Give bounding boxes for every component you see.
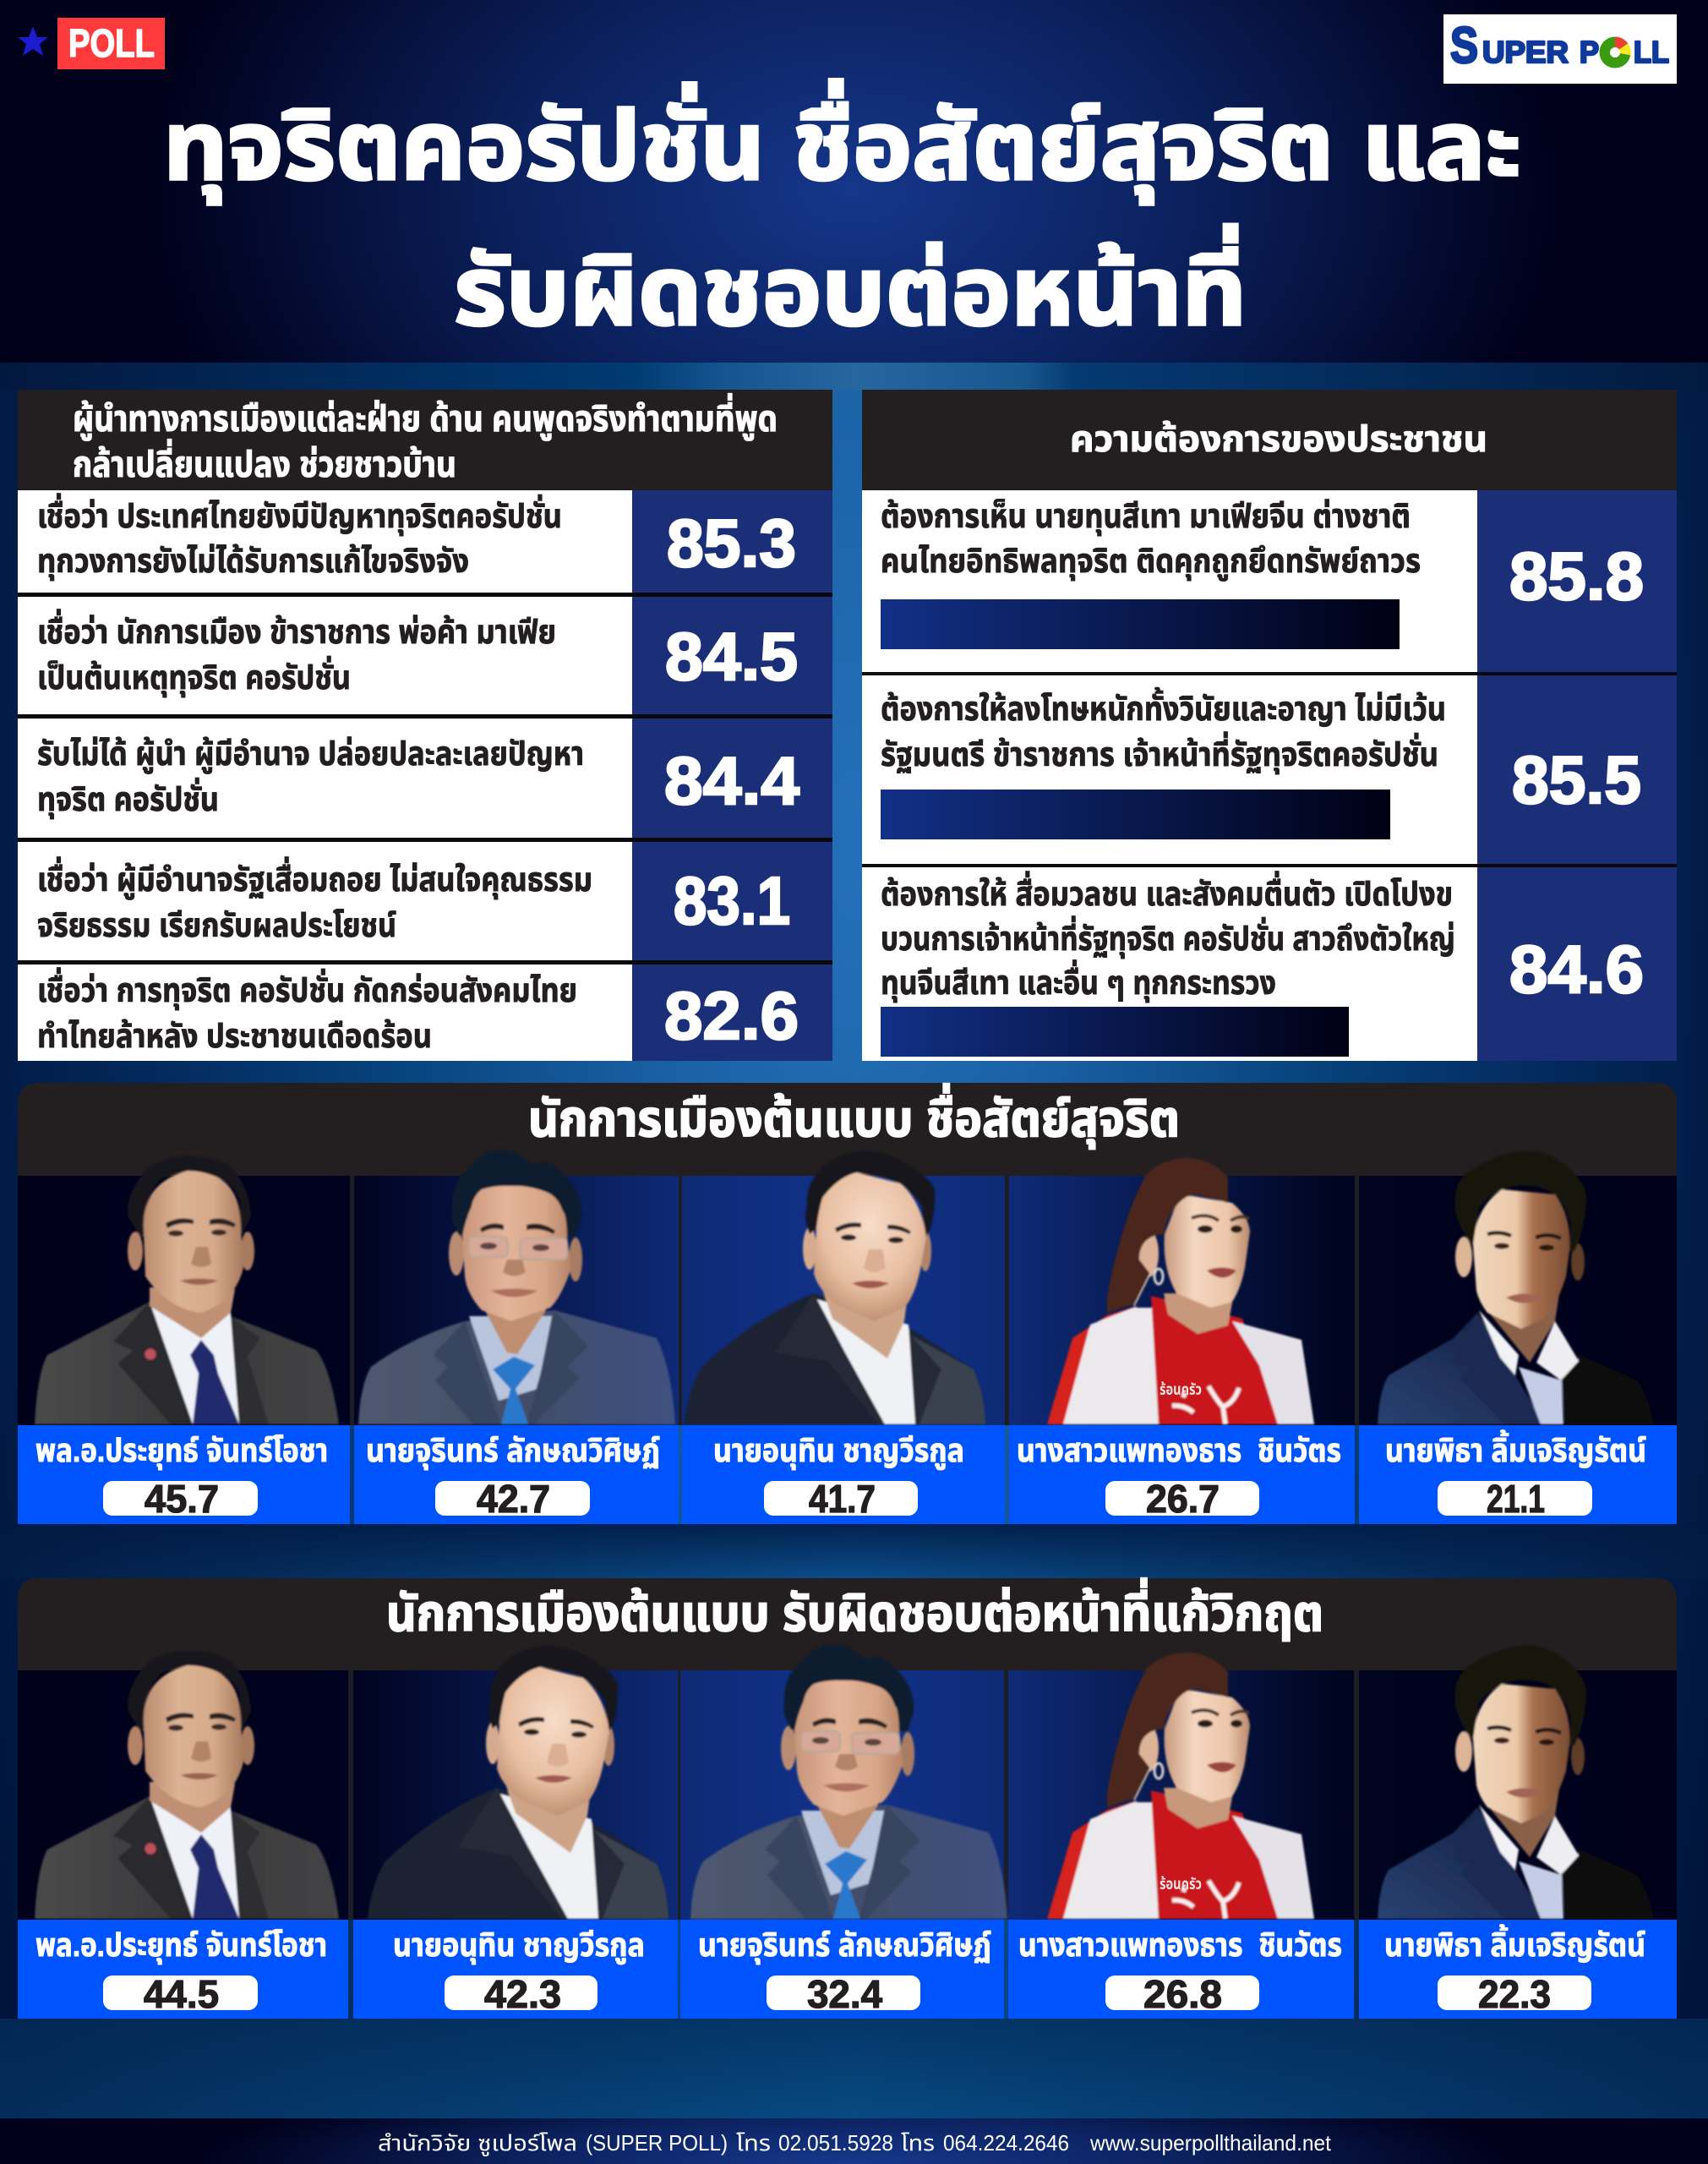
footer: โทร xyxy=(901,2130,935,2156)
panel heading: กล้าเปลี่ยนแปลง ช่วยชาวบ้าน xyxy=(73,439,456,485)
row 83.1: 83.1 xyxy=(674,863,790,938)
card: Pita 21.1: 21.1 xyxy=(1487,1477,1545,1521)
row 84.5 xyxy=(18,597,832,714)
card: Jurin 42.7 xyxy=(354,1425,679,1524)
row 84.4: 84.4 xyxy=(664,743,800,818)
card: Jurin 42.7: 42.7 xyxy=(477,1477,550,1521)
footer: โทร xyxy=(736,2130,771,2156)
logo: Super Poll: S xyxy=(1450,17,1478,74)
card: Jurin 32.4: นายจุรินทร์ ลักษณวิศิษฏ์ xyxy=(698,1928,991,1965)
portrait: Jurin xyxy=(690,1644,1007,1919)
card: Prayut 45.7: พล.อ.ประยุทธ์ จันทร์โอชา xyxy=(35,1434,328,1470)
row 85.8: ต้องการเห็น นายทุนสีเทา มาเฟียจีน ต่างชาติ xyxy=(881,499,1411,536)
panel heading xyxy=(862,390,1677,490)
card: Paetongtarn 26.8: นางสาวแพทองธาร ชินวัตร xyxy=(1018,1928,1342,1964)
row 82.6: 82.6 xyxy=(664,978,799,1053)
title: รับผิดชอบต่อหน้าที่ xyxy=(454,224,1247,346)
card: Anutin 41.7 xyxy=(682,1425,1005,1524)
row 85.5: 85.5 xyxy=(1512,742,1641,817)
row 84.6 xyxy=(862,867,1677,1061)
row 85.5: รัฐมนตรี ข้าราชการ เจ้าหน้าที่รัฐทุจริตคอรัปชั่น xyxy=(881,731,1438,774)
header band xyxy=(0,0,1708,363)
row 85.3 xyxy=(18,490,832,593)
card: Pita 22.3: นายพิธา ลิ้มเจริญรัตน์ xyxy=(1384,1924,1645,1964)
portrait: Prayut xyxy=(35,1156,339,1424)
card: Anutin 41.7: นายอนุทิน ชาญวีรกูล xyxy=(713,1434,964,1470)
panel heading: ความต้องการของประชาชน xyxy=(1070,419,1487,460)
row 84.6: ทุนจีนสีเทา และอื่น ๆ ทุกกระทรวง xyxy=(881,959,1276,1003)
section heading bar: นักการเมืองต้นแบบ ชื่อสัตย์สุจริต xyxy=(528,1083,1180,1150)
row 82.6: เชื่อว่า การทุจริต คอรัปชั่น กัดกร่อนสังคมไทย xyxy=(37,967,577,1010)
panel heading xyxy=(18,390,832,490)
portrait: Paetongtarn xyxy=(1047,1653,1314,1919)
row 84.6: 84.6 xyxy=(1509,932,1644,1007)
footer: www.superpollthailand.net xyxy=(1089,2130,1332,2156)
card: Jurin 32.4: 32.4 xyxy=(807,1972,882,2016)
badge: POLL: POLL xyxy=(68,21,155,65)
row 85.8 xyxy=(862,490,1677,672)
panel heading: ผู้นำทางการเมืองแต่ละฝ่าย ด้าน คนพูดจริงทำตามที่พูด xyxy=(73,393,778,440)
portrait: Anutin xyxy=(685,1151,985,1424)
footer: 02.051.5928 xyxy=(778,2130,893,2156)
portrait: Paetongtarn: ร้อนครัว xyxy=(1160,1875,1202,1894)
row 85.3: 85.3 xyxy=(667,505,796,581)
portrait: Jurin xyxy=(358,1150,675,1424)
footer: (SUPER POLL) xyxy=(586,2130,728,2156)
card: Anutin 42.3: 42.3 xyxy=(484,1972,561,2016)
icon: star xyxy=(18,26,48,56)
row 84.5: เชื่อว่า นักการเมือง ข้าราชการ พ่อค้า มาเฟีย xyxy=(37,609,556,651)
row 85.5 xyxy=(862,675,1677,864)
footer: 064.224.2646 xyxy=(943,2130,1069,2156)
row 85.3: เชื่อว่า ประเทศไทยยังมีปัญหาทุจริตคอรัปชั่น xyxy=(37,493,562,536)
title xyxy=(163,79,1521,346)
card: Paetongtarn 26.7: 26.7 xyxy=(1146,1477,1220,1521)
row 82.6 xyxy=(18,965,832,1061)
row 84.5: เป็นต้นเหตุทุจริต คอรัปชั่น xyxy=(37,655,351,697)
logo: Super Poll: UPER xyxy=(1482,35,1569,69)
row 83.1: เชื่อว่า ผู้มีอำนาจรัฐเสื่อมถอย ไม่สนใจคุณธรรม xyxy=(37,856,592,899)
card: Prayut 45.7 xyxy=(18,1425,350,1524)
portrait: Anutin xyxy=(368,1646,668,1919)
row 82.6: ทำไทยล้าหลัง ประชาชนเดือดร้อน xyxy=(37,1019,432,1055)
row 84.6: บวนการเจ้าหน้าที่รัฐทุจริต คอรัปชั่น สาวถึงตัวใหญ่ xyxy=(881,915,1455,959)
section heading bar xyxy=(18,1577,1677,1670)
title: ทุจริตคอรัปชั่น ชื่อสัตย์สุจริต และ xyxy=(163,79,1521,205)
portrait: Paetongtarn: ร้อนครัว xyxy=(1160,1380,1202,1399)
section heading bar xyxy=(18,1083,1677,1176)
row 83.1: จริยธรรม เรียกรับผลประโยชน์ xyxy=(37,908,396,944)
card: Prayut 44.5: 44.5 xyxy=(144,1972,219,2016)
card: Jurin 42.7: นายจุรินทร์ ลักษณวิศิษฏ์ xyxy=(366,1434,660,1470)
photo background xyxy=(18,1176,1677,1425)
row 84.5: 84.5 xyxy=(665,619,798,694)
card: Paetongtarn 26.8 xyxy=(1008,1920,1354,2019)
portrait: Prayut xyxy=(35,1651,339,1919)
card: Pita 21.1 xyxy=(1359,1425,1677,1524)
card: Prayut 45.7: 45.7 xyxy=(145,1477,219,1521)
panel: politician views xyxy=(18,390,832,1061)
section: honest role models xyxy=(18,1083,1677,1524)
logo: Super Poll: P xyxy=(1580,35,1599,69)
row 84.4: ทุจริต คอรัปชั่น xyxy=(37,777,219,819)
card: Prayut 44.5: พล.อ.ประยุทธ์ จันทร์โอชา xyxy=(35,1928,327,1965)
row 85.3: ทุกวงการยังไม่ได้รับการแก้ไขจริงจัง xyxy=(37,544,469,581)
row 85.5: ต้องการให้ลงโทษหนักทั้งวินัยและอาญา ไม่มีเว้น xyxy=(881,686,1446,728)
card: Pita 22.3 xyxy=(1359,1920,1677,2019)
card: Anutin 42.3: นายอนุทิน ชาญวีรกูล xyxy=(393,1928,645,1965)
footer: สำนักวิจัย ซูเปอร์โพล xyxy=(378,2130,577,2156)
row 85.8: คนไทยอิทธิพลทุจริต ติดคุกถูกยึดทรัพย์ถาวร xyxy=(881,544,1421,581)
row 83.1 xyxy=(18,842,832,960)
section heading bar: นักการเมืองต้นแบบ รับผิดชอบต่อหน้าที่แก้วิกฤต xyxy=(386,1577,1323,1642)
row 84.4 xyxy=(18,719,832,838)
card: Pita 22.3: 22.3 xyxy=(1478,1972,1551,2016)
card: Anutin 42.3 xyxy=(353,1920,678,2019)
card: Paetongtarn 26.7: นางสาวแพทองธาร ชินวัตร xyxy=(1017,1434,1341,1469)
card: Paetongtarn 26.8: 26.8 xyxy=(1143,1972,1222,2016)
row 84.4: รับไม่ได้ ผู้นำ ผู้มีอำนาจ ปล่อยปละละเลยปัญหา xyxy=(37,736,584,773)
row 84.6: ต้องการให้ สื่อมวลชน และสังคมตื่นตัว เปิดโปงข xyxy=(881,871,1453,913)
section: responsible role models xyxy=(18,1577,1677,2019)
card: Jurin 32.4 xyxy=(680,1920,1004,2019)
portrait: Paetongtarn xyxy=(1047,1158,1314,1424)
photo background xyxy=(18,1670,1677,1920)
logo: Super Poll xyxy=(1443,14,1677,84)
panel: public demands xyxy=(862,390,1677,1061)
card: Anutin 41.7: 41.7 xyxy=(809,1477,876,1521)
card: Prayut 44.5 xyxy=(18,1920,348,2019)
logo: Super Poll: LL xyxy=(1634,35,1669,69)
portrait: Pita xyxy=(1378,1151,1654,1424)
footer xyxy=(0,2118,1708,2164)
card: Paetongtarn 26.7 xyxy=(1009,1425,1355,1524)
row 85.8: 85.8 xyxy=(1509,538,1644,614)
portrait: Pita xyxy=(1378,1646,1654,1919)
card: Pita 21.1: นายพิธา ลิ้มเจริญรัตน์ xyxy=(1385,1429,1646,1469)
